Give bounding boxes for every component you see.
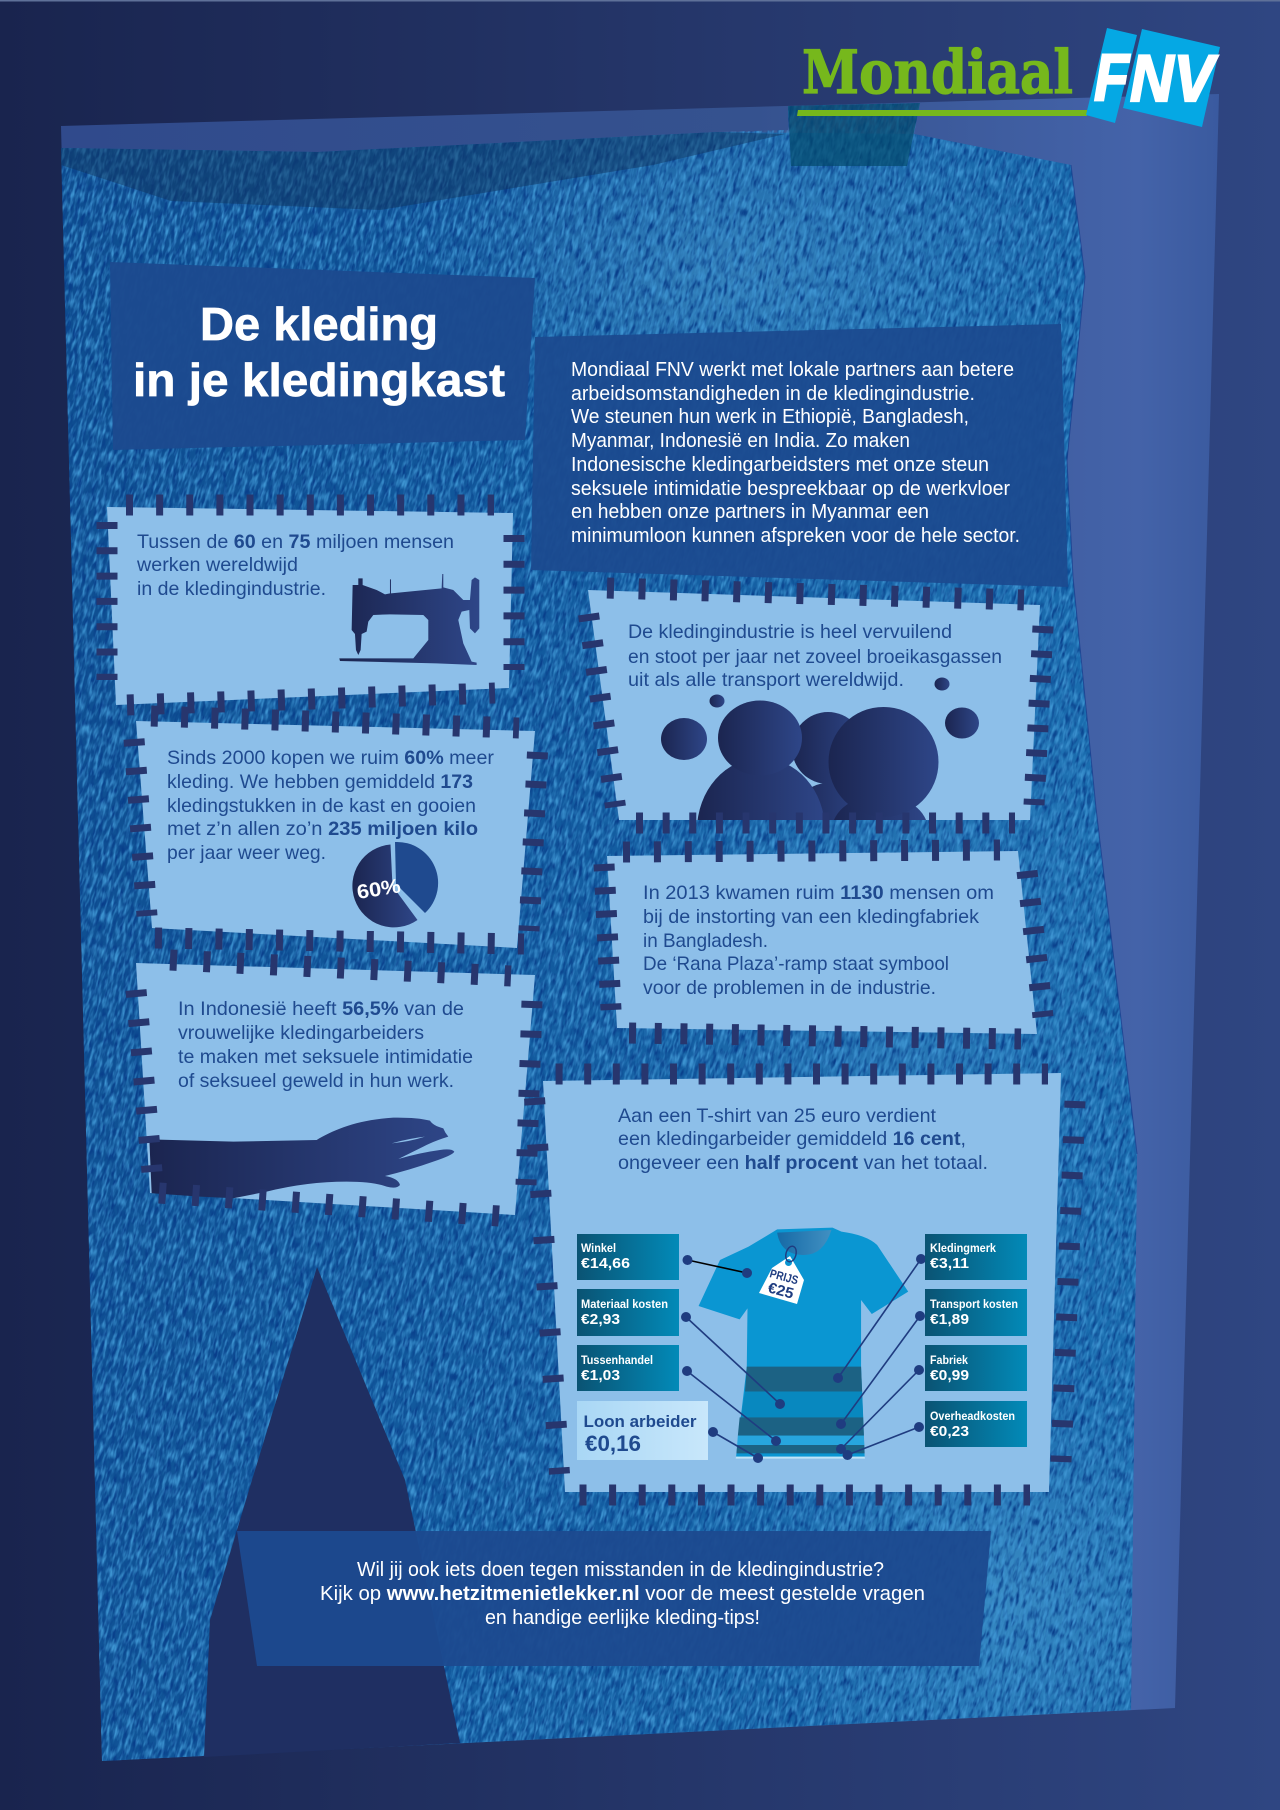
card text: per jaar weer weg.	[167, 842, 326, 864]
card text: Tussen de 60 en 75 miljoen mensen	[137, 531, 454, 553]
patch card: 60-75 million workers	[107, 505, 514, 705]
card text: Aan een T-shirt van 25 euro verdient	[618, 1105, 937, 1127]
stitches	[604, 850, 1043, 1039]
price tag: €25	[766, 1279, 795, 1303]
price tag	[759, 1245, 804, 1304]
card text: ongeveer een half procent van het totaal.	[618, 1152, 988, 1174]
patch card: Indonesia harassment	[136, 960, 535, 1216]
cost label: Transport kosten	[925, 1289, 1027, 1336]
cost label: Fabriek: Fabriek	[930, 1355, 969, 1367]
cost label: Tussenhandel: €1,03	[581, 1367, 620, 1384]
card text: bij de instorting van een kledingfabriek	[643, 906, 979, 928]
intro text: We steunen hun werk in Ethiopië, Bangladesh,	[571, 406, 969, 428]
cost label: Tussenhandel: Tussenhandel	[581, 1355, 653, 1367]
pie chart 60%	[352, 842, 438, 927]
card text: In Indonesië heeft 56,5% van de	[178, 998, 464, 1020]
cost label: Kledingmerk	[925, 1234, 1027, 1280]
card text: in de kledingindustrie.	[137, 578, 326, 600]
cost label: Loon arbeider	[577, 1401, 708, 1460]
card text	[643, 882, 994, 999]
logo flag right	[1123, 29, 1220, 127]
jeans pocket shadow	[61, 132, 785, 210]
intro text: Mondiaal FNV werkt met lokale partners aan betere	[571, 359, 1014, 381]
card text	[618, 1105, 988, 1174]
card text	[136, 531, 454, 600]
stitches	[107, 505, 514, 705]
intro text: en hebben onze partners in Myanmar een	[571, 501, 929, 523]
call to action text: en handige eerlijke kleding-tips!	[485, 1607, 760, 1629]
call to action panel	[237, 1531, 991, 1666]
logo letters: NV	[1130, 41, 1219, 115]
denim fold shadow	[1067, 165, 1137, 1154]
pie chart 60%: 60%	[355, 875, 402, 904]
card text: voor de problemen in de industrie.	[643, 977, 936, 999]
cost label: Fabriek	[925, 1345, 1027, 1391]
title	[133, 298, 505, 406]
card text: en stoot per jaar net zoveel broeikasgassen	[628, 646, 1002, 668]
cost label: Transport kosten: Transport kosten	[930, 1299, 1018, 1311]
card text: in Bangladesh.	[643, 930, 768, 952]
call to action text: Wil jij ook iets doen tegen misstanden in de kledingindustrie?	[357, 1559, 884, 1581]
card text	[628, 621, 1002, 691]
intro panel	[531, 324, 1068, 587]
title: in je kledingkast	[133, 354, 505, 406]
logo underline	[797, 110, 1087, 116]
cost label: Kledingmerk: €3,11	[930, 1255, 969, 1272]
patch card: buying more clothes	[134, 716, 538, 948]
cost label: Materiaal kosten	[577, 1289, 679, 1336]
card text: kledingstukken in de kast en gooien	[167, 795, 476, 817]
icon: arm and hand	[149, 1118, 454, 1198]
icon: sewing machine	[339, 574, 479, 665]
cost label: Overheadkosten	[925, 1401, 1027, 1447]
title: De kleding	[200, 298, 438, 350]
stitches	[136, 960, 532, 1216]
cost label: Loon arbeider: €0,16	[585, 1431, 641, 1456]
card text: kleding. We hebben gemiddeld 173	[167, 771, 473, 793]
logo word: Mondiaal	[802, 38, 1073, 108]
call to action text: Kijk op www.hetzitmenietlekker.nl voor de meest gestelde vragen	[320, 1583, 925, 1605]
card text: te maken met seksuele intimidatie	[178, 1046, 473, 1068]
intro text: Myanmar, Indonesië en India. Zo maken	[571, 430, 910, 452]
logo letters: F	[1094, 40, 1130, 114]
card text: uit als alle transport wereldwijd.	[628, 669, 904, 691]
card text: vrouwelijke kledingarbeiders	[178, 1022, 424, 1044]
title panel	[110, 262, 535, 450]
intro text: minimumloon kunnen afspreken voor de hele sector.	[571, 525, 1020, 547]
card text: een kledingarbeider gemiddeld 16 cent,	[618, 1128, 966, 1150]
call to action text	[320, 1559, 925, 1629]
intro text: arbeidsomstandigheden in de kledingindustrie.	[571, 383, 975, 405]
cost label: Loon arbeider: Loon arbeider	[584, 1412, 697, 1431]
logo letters	[1094, 40, 1219, 115]
cost label: Kledingmerk: Kledingmerk	[930, 1243, 997, 1255]
connector lines and dots	[681, 1254, 926, 1463]
cost label: Overheadkosten: €0,23	[930, 1423, 969, 1440]
cost label: Winkel: €14,66	[581, 1255, 630, 1272]
card text: De ‘Rana Plaza’-ramp staat symbool	[643, 953, 949, 975]
logo Mondiaal FNV	[797, 28, 1220, 127]
patch card: Rana Plaza	[604, 850, 1043, 1039]
intro text: Indonesische kledingarbeidsters met onze steun	[571, 454, 989, 476]
card text	[178, 998, 473, 1092]
intro text	[571, 359, 1020, 547]
cost label: Materiaal kosten: Materiaal kosten	[581, 1299, 668, 1311]
card text: werken wereldwijd	[136, 554, 298, 576]
intro text: seksuele intimidatie bespreekbaar op de werkvloer	[571, 478, 1010, 500]
cost label: Materiaal kosten: €2,93	[581, 1311, 620, 1328]
cost label: Fabriek: €0,99	[930, 1367, 969, 1384]
icon: smoke clouds	[661, 678, 979, 820]
card text: In 2013 kwamen ruim 1130 mensen om	[643, 882, 994, 904]
card text: of seksueel geweld in hun werk.	[178, 1070, 454, 1092]
patch card: T-shirt price breakdown	[534, 1073, 1075, 1495]
stitches	[134, 716, 538, 944]
jeans denim fabric	[61, 103, 1137, 1761]
card text: met z’n allen zo’n 235 miljoen kilo	[167, 818, 478, 840]
price tag: PRIJS	[768, 1266, 800, 1287]
card text	[167, 747, 494, 864]
cost label: Tussenhandel	[577, 1345, 679, 1391]
cost label: Winkel	[577, 1234, 679, 1280]
stitches	[588, 588, 1043, 823]
cost label: Transport kosten: €1,89	[930, 1311, 969, 1328]
T-shirt illustration	[699, 1228, 908, 1459]
card text: Sinds 2000 kopen we ruim 60% meer	[167, 747, 494, 769]
dark wedge between trouser legs	[204, 1267, 460, 1757]
belt loop	[788, 103, 920, 166]
logo flag left	[1086, 28, 1137, 123]
cost label: Winkel: Winkel	[581, 1243, 616, 1255]
stitches	[534, 1074, 1075, 1495]
cost label: Overheadkosten: Overheadkosten	[930, 1411, 1015, 1423]
card text: De kledingindustrie is heel vervuilend	[628, 621, 952, 643]
patch card: pollution	[578, 578, 1054, 834]
